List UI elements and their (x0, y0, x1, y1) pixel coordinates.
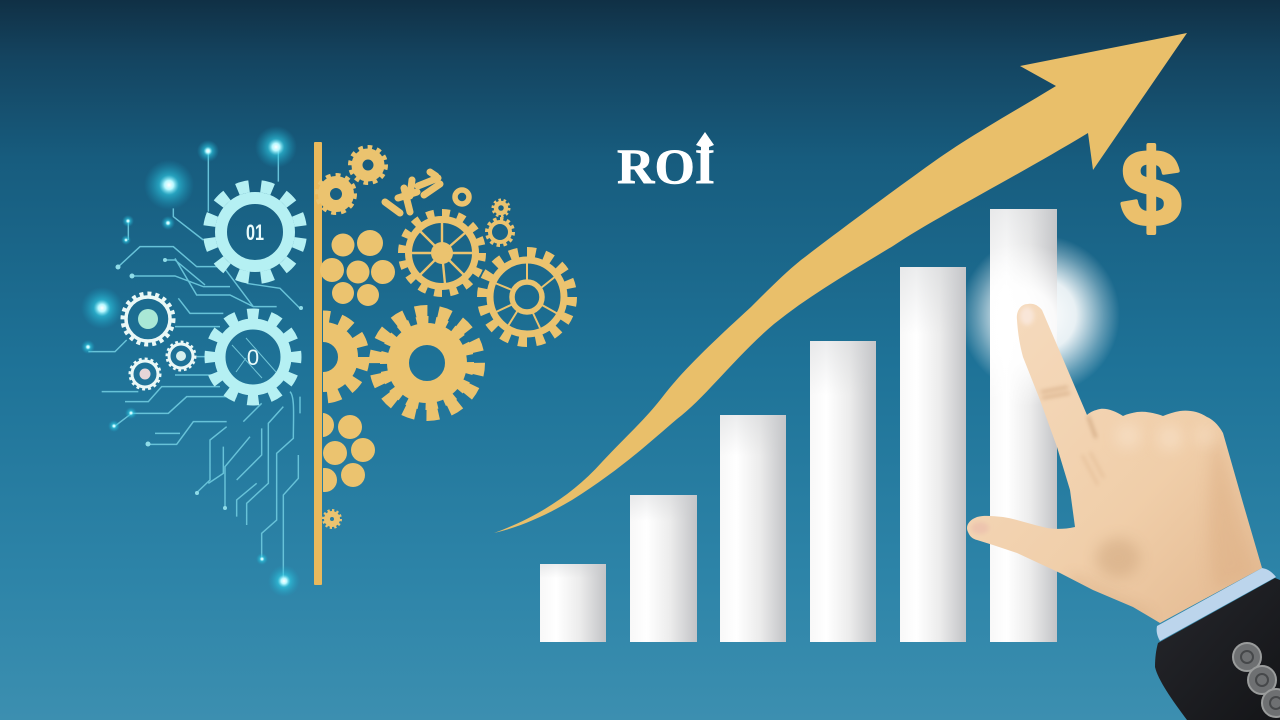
half gear at divider (323, 310, 370, 404)
gear: lower cyan: 0 (247, 345, 259, 370)
vertical gold divider (314, 142, 322, 585)
spoked gear (402, 213, 482, 293)
small gears (123, 294, 195, 389)
gold dots upper cluster (320, 230, 395, 306)
ring gear (482, 252, 572, 342)
ROI label: ROI (617, 138, 715, 194)
dollar sign: $ (1121, 127, 1181, 248)
gear: lower cyan (210, 314, 296, 400)
hand pointing (967, 304, 1280, 720)
glowing nodes (81, 126, 300, 597)
bar chart (540, 209, 1102, 642)
gear: upper cyan (209, 186, 301, 278)
scattered gold fragments (385, 172, 469, 213)
circuit end dots (116, 258, 303, 510)
shirt cuff (1157, 568, 1276, 641)
white glow behind finger (960, 235, 1120, 395)
small gold gears (318, 148, 513, 528)
panel: gold gears (283, 148, 572, 528)
icon: small up arrow (696, 132, 714, 152)
panel: AI circuit brain (81, 126, 303, 597)
hand shading (971, 307, 1255, 618)
gold dots lower cluster (323, 413, 375, 492)
large gold gear (375, 311, 479, 415)
circuit traces (88, 150, 300, 580)
gear: upper cyan: 01 (246, 220, 264, 245)
suit sleeve (1155, 578, 1280, 720)
sleeve buttons (1233, 643, 1280, 717)
growth arrow (494, 33, 1187, 533)
